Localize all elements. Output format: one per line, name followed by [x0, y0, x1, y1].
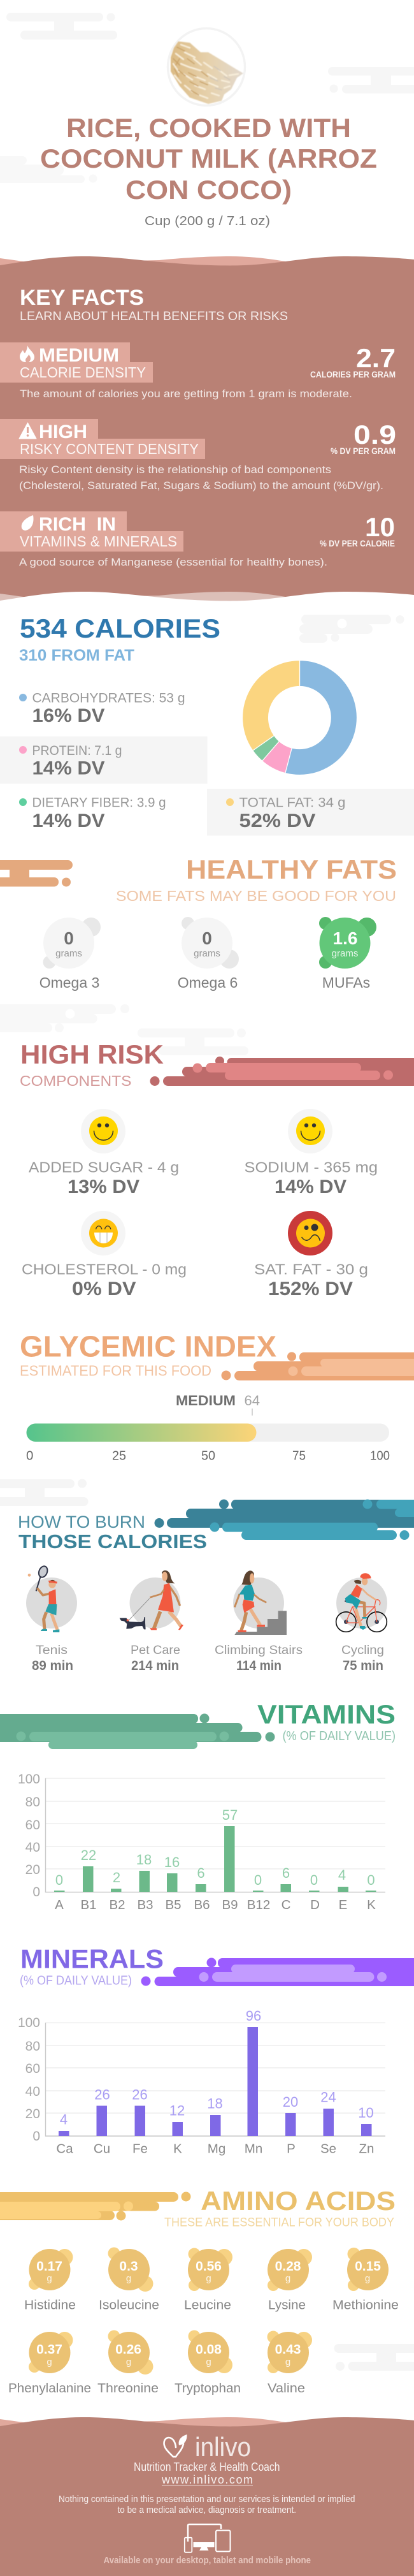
title: CON COCO) [125, 175, 292, 205]
background cloud: top right [328, 67, 414, 93]
stat: valine [268, 2331, 312, 2396]
bar chart: vitamins: 20 [25, 1862, 40, 1877]
bar chart: vitamins: 4 [338, 1867, 346, 1883]
legend: total fat [207, 789, 414, 835]
fact: risky content density: (Cholesterol, Saturated Fat, Sugars & Sodium) to the amount (%DV/gr). [19, 479, 383, 492]
stat: valine: Valine [268, 2382, 305, 2396]
decor: teal streak [154, 1500, 414, 1540]
stat: MUFAs: grams [332, 948, 358, 959]
stat: threonine [97, 2330, 159, 2396]
stat: tryptophan: 0.08 [196, 2343, 222, 2357]
panel: amino acids [0, 2186, 399, 2396]
fact: risky content density: Risky Content density is the relationship of bad components [19, 464, 331, 476]
bar chart: minerals: Ca [56, 2141, 73, 2156]
item: added sugar [29, 1109, 179, 1197]
heading: healthy fats: HEALTHY FATS [186, 854, 397, 884]
activity: climbing stairs [215, 1570, 303, 1673]
heading: calories: 534 CALORIES [20, 613, 220, 643]
bar chart: vitamins [18, 1772, 385, 1912]
disclaimer: Nothing contained in this presentation and our services is intended or implied [59, 2494, 355, 2505]
website link: www.inlivo.com [161, 2473, 253, 2486]
bar chart: minerals [18, 2008, 385, 2156]
bar chart: vitamins: 0 [55, 1872, 63, 1888]
fact: rich in vitamins and minerals [0, 511, 395, 568]
stat: histidine [24, 2249, 76, 2312]
bar chart: minerals: Zn [359, 2141, 374, 2156]
stat: histidine: g [46, 2273, 52, 2284]
fact: calorie density: CALORIE DENSITY [20, 364, 146, 381]
title [40, 113, 377, 205]
item: sodium: 14% DV [275, 1176, 346, 1197]
stat: phenylalanine: 0.37 [36, 2343, 62, 2357]
subheading: amino acids: THESE ARE ESSENTIAL FOR YOUR BODY [164, 2216, 394, 2229]
food photo: rice in ring [168, 28, 245, 106]
bar chart: minerals: Cu [94, 2141, 110, 2156]
stat: phenylalanine: g [46, 2357, 52, 2367]
panel: vitamins [0, 1699, 396, 1912]
bar chart: vitamins: 40 [25, 1840, 40, 1855]
bar chart: minerals: Mn [245, 2141, 262, 2156]
subheading: calories from fat: 310 FROM FAT [19, 647, 134, 664]
gauge scale: 100 [370, 1449, 390, 1463]
fact: risky content density: 0.9 [353, 420, 396, 450]
legend: dietary fiber: DIETARY FIBER: 3.9 g [32, 796, 166, 810]
panel: minerals [18, 1943, 414, 2156]
item: added sugar: ADDED SUGAR - 4 g [29, 1159, 179, 1176]
bar chart: vitamins: 16 [164, 1854, 180, 1870]
stat: histidine: Histidine [24, 2298, 76, 2312]
subheading: healthy fats: SOME FATS MAY BE GOOD FOR YOU [116, 888, 396, 904]
item: added sugar: 13% DV [68, 1176, 139, 1197]
donut chart [243, 661, 357, 775]
bar chart: vitamins: B5 [165, 1898, 182, 1912]
bar chart: vitamins: E [339, 1898, 347, 1912]
gauge scale [26, 1449, 390, 1463]
bar chart: vitamins: K [367, 1898, 376, 1912]
stat: leucine: 0.56 [196, 2259, 222, 2274]
bar chart: minerals: 10 [358, 2105, 374, 2121]
bar chart: minerals: Fe [132, 2141, 148, 2156]
bar chart: minerals: 100 [18, 2016, 40, 2030]
bar chart: minerals: 0 [32, 2129, 40, 2144]
bar chart: minerals: 20 [25, 2107, 40, 2121]
background cloud: behind title [0, 156, 97, 183]
disclaimer [59, 2494, 355, 2515]
stat: isoleucine [99, 2247, 159, 2312]
stat: MUFAs: 1.6 [333, 928, 357, 948]
bar chart: vitamins: C [282, 1898, 291, 1912]
panel: healthy fats [0, 854, 397, 991]
bar chart: minerals: 24 [320, 2089, 336, 2105]
stat: omega 6: Omega 6 [178, 974, 238, 991]
bar chart: minerals: 18 [207, 2095, 223, 2112]
activity: tennis: Tenis [36, 1643, 68, 1657]
decor: green streak [0, 1714, 275, 1749]
gauge scale: 25 [112, 1449, 126, 1463]
bar chart: vitamins: D [310, 1898, 320, 1912]
icon: person on stairs [234, 1570, 287, 1635]
fact: calorie density: 2.7 [356, 343, 396, 373]
bar chart: vitamins: 6 [197, 1865, 205, 1881]
gauge value: MEDIUM [176, 1393, 236, 1409]
item: cholesterol: 0% DV [72, 1278, 136, 1299]
activity: cycling: Cycling [341, 1643, 384, 1657]
fact: risky content density: RISKY CONTENT DENSITY [20, 441, 199, 457]
icon: leaf [22, 515, 33, 531]
bar chart: vitamins: 18 [136, 1852, 152, 1868]
activity: climbing stairs: 114 min [236, 1658, 282, 1673]
background cloud: high risk right [138, 1028, 248, 1055]
bar chart: vitamins: 0 [310, 1872, 318, 1888]
fact: rich in vitamins and minerals: VITAMINS & MINERALS [20, 533, 177, 550]
fact: rich in vitamins and minerals: RICH IN [39, 514, 116, 535]
stat: threonine: Threonine [97, 2382, 159, 2396]
activity: tennis [26, 1565, 77, 1673]
bar chart: vitamins: 100 [18, 1772, 40, 1787]
panel: how to burn those calories [18, 1500, 414, 1673]
legend: carbohydrates: 16% DV [32, 705, 104, 726]
bar chart: vitamins: B9 [222, 1898, 238, 1912]
legend: carbohydrates [19, 691, 185, 726]
item: cholesterol: CHOLESTEROL - 0 mg [22, 1261, 187, 1278]
fact: risky content density [0, 419, 396, 492]
icon: person walking dog [120, 1570, 183, 1630]
bar chart: minerals: K [173, 2141, 182, 2156]
tagline: Nutrition Tracker & Health Coach [134, 2461, 280, 2473]
stat: valine: g [285, 2357, 290, 2367]
disclaimer: to be a medical advice, diagnosis or treatment. [117, 2505, 296, 2515]
heading: those calories: THOSE CALORIES [18, 1530, 207, 1553]
title: COCONUT MILK (ARROZ [40, 143, 377, 173]
heading: high risk: HIGH RISK [20, 1039, 164, 1069]
fact: calorie density [0, 342, 396, 400]
activity: climbing stairs: Climbing Stairs [215, 1643, 303, 1657]
fact: calorie density: The amount of calories you are getting from 1 gram is moderate. [20, 388, 352, 400]
bar chart: vitamins: A [55, 1898, 64, 1912]
heading: vitamins: VITAMINS [257, 1699, 396, 1729]
stat: tryptophan: Tryptophan [175, 2382, 241, 2396]
bar chart: vitamins: 6 [282, 1865, 290, 1881]
gauge bar [27, 1423, 389, 1442]
stat: omega 3 [39, 918, 101, 991]
availability note: Available on your desktop, tablet and mobile phone [103, 2555, 311, 2566]
bar chart: minerals: 80 [25, 2039, 40, 2054]
panel: footer [0, 2417, 414, 2576]
stat: methionine: 0.15 [355, 2259, 381, 2274]
fact: calorie density: CALORIES PER GRAM [310, 370, 396, 379]
stat: leucine: Leucine [184, 2298, 231, 2312]
stat: valine: 0.43 [275, 2343, 301, 2357]
decor: amber streak [0, 2192, 191, 2220]
fact: rich in vitamins and minerals: 10 [365, 512, 395, 542]
bar chart: minerals: 60 [25, 2061, 40, 2076]
fact: calorie density: MEDIUM [39, 345, 119, 366]
icon: grinning face [89, 1219, 118, 1247]
bar chart: minerals: 26 [132, 2086, 148, 2103]
stat: threonine: g [126, 2357, 131, 2367]
stat: omega 3: Omega 3 [39, 974, 99, 991]
stat: lysine: g [285, 2273, 290, 2284]
stat: lysine: Lysine [268, 2298, 306, 2312]
stat: methionine: Methionine [332, 2298, 399, 2312]
logo: inlivo heart [164, 2432, 251, 2462]
item: sodium [245, 1109, 378, 1197]
gauge value [176, 1393, 260, 1416]
subheading: minerals: (% OF DAILY VALUE) [20, 1974, 132, 1988]
background cloud: burn calories [0, 1479, 88, 1506]
icon: flame [20, 346, 34, 362]
title: RICE, COOKED WITH [66, 113, 351, 143]
stat: lysine [268, 2249, 312, 2312]
stat: lysine: 0.28 [275, 2259, 301, 2274]
stat: tryptophan [175, 2330, 241, 2396]
stat: MUFAs [319, 917, 376, 991]
subheading: components: COMPONENTS [20, 1072, 131, 1089]
gauge scale: 75 [292, 1449, 306, 1463]
subheading: vitamins: (% OF DAILY VALUE) [283, 1729, 396, 1743]
decor: glycemic streak [222, 1352, 414, 1380]
legend: total fat: 52% DV [239, 810, 316, 831]
bar chart: minerals: 96 [246, 2008, 261, 2024]
icon: tennis player [28, 1565, 59, 1632]
bar chart: vitamins: B6 [194, 1898, 210, 1912]
stat: histidine: 0.17 [36, 2259, 62, 2274]
panel: high risk components [20, 1039, 414, 1299]
stat: omega 6 [178, 917, 239, 991]
bar chart: vitamins: 80 [25, 1795, 40, 1810]
icon: worried face [296, 1219, 325, 1247]
icon: devices [185, 2524, 231, 2552]
bar chart: vitamins: B1 [80, 1898, 97, 1912]
bar chart: vitamins: 57 [222, 1807, 238, 1823]
fact: risky content density: HIGH [39, 421, 87, 443]
heading: minerals: MINERALS [20, 1943, 164, 1974]
fact: rich in vitamins and minerals: % DV PER CALORIE [320, 539, 395, 548]
stat: isoleucine: Isoleucine [99, 2298, 159, 2312]
bar chart: minerals: 26 [94, 2086, 110, 2103]
bar chart: vitamins: 0 [254, 1872, 262, 1888]
item: saturated fat: SAT. FAT - 30 g [254, 1261, 368, 1278]
item: saturated fat [254, 1211, 368, 1299]
legend: total fat: TOTAL FAT: 34 g [239, 796, 345, 810]
heading: key facts: KEY FACTS [20, 286, 144, 310]
stat: methionine [332, 2248, 399, 2312]
activity: cycling [336, 1573, 387, 1673]
stat: omega 3: grams [55, 948, 82, 959]
bar chart: vitamins: B12 [247, 1898, 270, 1912]
bar chart: vitamins: 60 [25, 1818, 40, 1833]
activity: cycling: 75 min [343, 1658, 383, 1673]
subheading: key facts: LEARN ABOUT HEALTH BENEFITS OR RISKS [20, 309, 288, 323]
bar chart: vitamins: 0 [367, 1872, 375, 1888]
stat: threonine: 0.26 [115, 2343, 141, 2357]
serving size: Cup (200 g / 7.1 oz) [145, 214, 270, 228]
stat: isoleucine: g [126, 2273, 131, 2284]
panel: key facts [0, 256, 414, 612]
stat: isoleucine: 0.3 [119, 2259, 138, 2274]
heading: amino acids: AMINO ACIDS [201, 2186, 396, 2216]
subheading: estimated: ESTIMATED FOR THIS FOOD [20, 1362, 211, 1379]
activity: tennis: 89 min [32, 1658, 73, 1673]
activity: pet care: 214 min [131, 1658, 179, 1673]
logo: inlivo heart: inlivo [195, 2432, 251, 2462]
bar chart: minerals: 12 [169, 2103, 185, 2118]
bar chart: minerals: Se [320, 2141, 336, 2156]
fact: rich in vitamins and minerals: A good source of Manganese (essential for healthy bones). [19, 556, 327, 568]
gauge scale: 0 [26, 1449, 33, 1463]
stat: omega 6: 0 [202, 928, 212, 948]
stat: MUFAs: MUFAs [322, 974, 370, 991]
bar chart: minerals: 20 [283, 2094, 298, 2110]
stat: omega 6: grams [194, 948, 220, 959]
stat: leucine [184, 2248, 232, 2312]
background cloud: high risk left [0, 1004, 129, 1032]
bar chart: minerals: 40 [25, 2084, 40, 2099]
stat: omega 3: 0 [64, 928, 74, 948]
activity: pet care [120, 1570, 183, 1673]
bar chart: vitamins: 0 [32, 1885, 40, 1899]
legend: protein: 14% DV [32, 757, 104, 779]
bar chart: vitamins: B2 [109, 1898, 125, 1912]
item: cholesterol [22, 1211, 187, 1299]
bar chart: minerals: P [287, 2141, 296, 2156]
activity: pet care: Pet Care [131, 1643, 180, 1657]
bar chart: minerals: Mg [208, 2141, 225, 2156]
legend: protein: PROTEIN: 7.1 g [32, 743, 122, 758]
stat: phenylalanine: Phenylalanine [8, 2382, 91, 2396]
decor: high risk streak [150, 1057, 414, 1086]
item: sodium: SODIUM - 365 mg [245, 1159, 378, 1176]
stat: leucine: g [206, 2273, 211, 2284]
bar chart: vitamins: 22 [81, 1847, 96, 1863]
decor: purple streak [141, 1958, 414, 1986]
icon: smiley [89, 1116, 118, 1145]
bar chart: vitamins: B3 [137, 1898, 153, 1912]
legend: dietary fiber [19, 796, 166, 831]
icon: warning triangle [19, 423, 36, 439]
panel: glycemic index [20, 1330, 414, 1463]
stat: phenylalanine [8, 2332, 91, 2396]
bar chart: minerals: 4 [60, 2112, 68, 2127]
background cloud: calories [299, 615, 404, 643]
gauge value: 64 [245, 1393, 260, 1409]
item: saturated fat: 152% DV [268, 1278, 353, 1299]
background cloud: amino acids lower right [334, 2344, 414, 2371]
fact: risky content density: % DV PER GRAM [331, 446, 396, 456]
bar chart: vitamins: 2 [113, 1870, 120, 1885]
heading: how to burn: HOW TO BURN [18, 1512, 145, 1532]
stat: tryptophan: g [206, 2357, 211, 2367]
icon: cyclist [336, 1573, 387, 1632]
gauge scale: 50 [201, 1449, 215, 1463]
legend: protein [0, 736, 208, 784]
background cloud: top left [6, 13, 117, 40]
stat: methionine: g [365, 2273, 370, 2284]
legend: carbohydrates: CARBOHYDRATES: 53 g [32, 691, 185, 705]
legend: dietary fiber: 14% DV [32, 810, 104, 831]
icon: smiley [296, 1116, 325, 1145]
decor: healthy fats streak [0, 860, 73, 886]
heading: glycemic index: GLYCEMIC INDEX [20, 1330, 276, 1363]
panel: calories [0, 613, 414, 835]
